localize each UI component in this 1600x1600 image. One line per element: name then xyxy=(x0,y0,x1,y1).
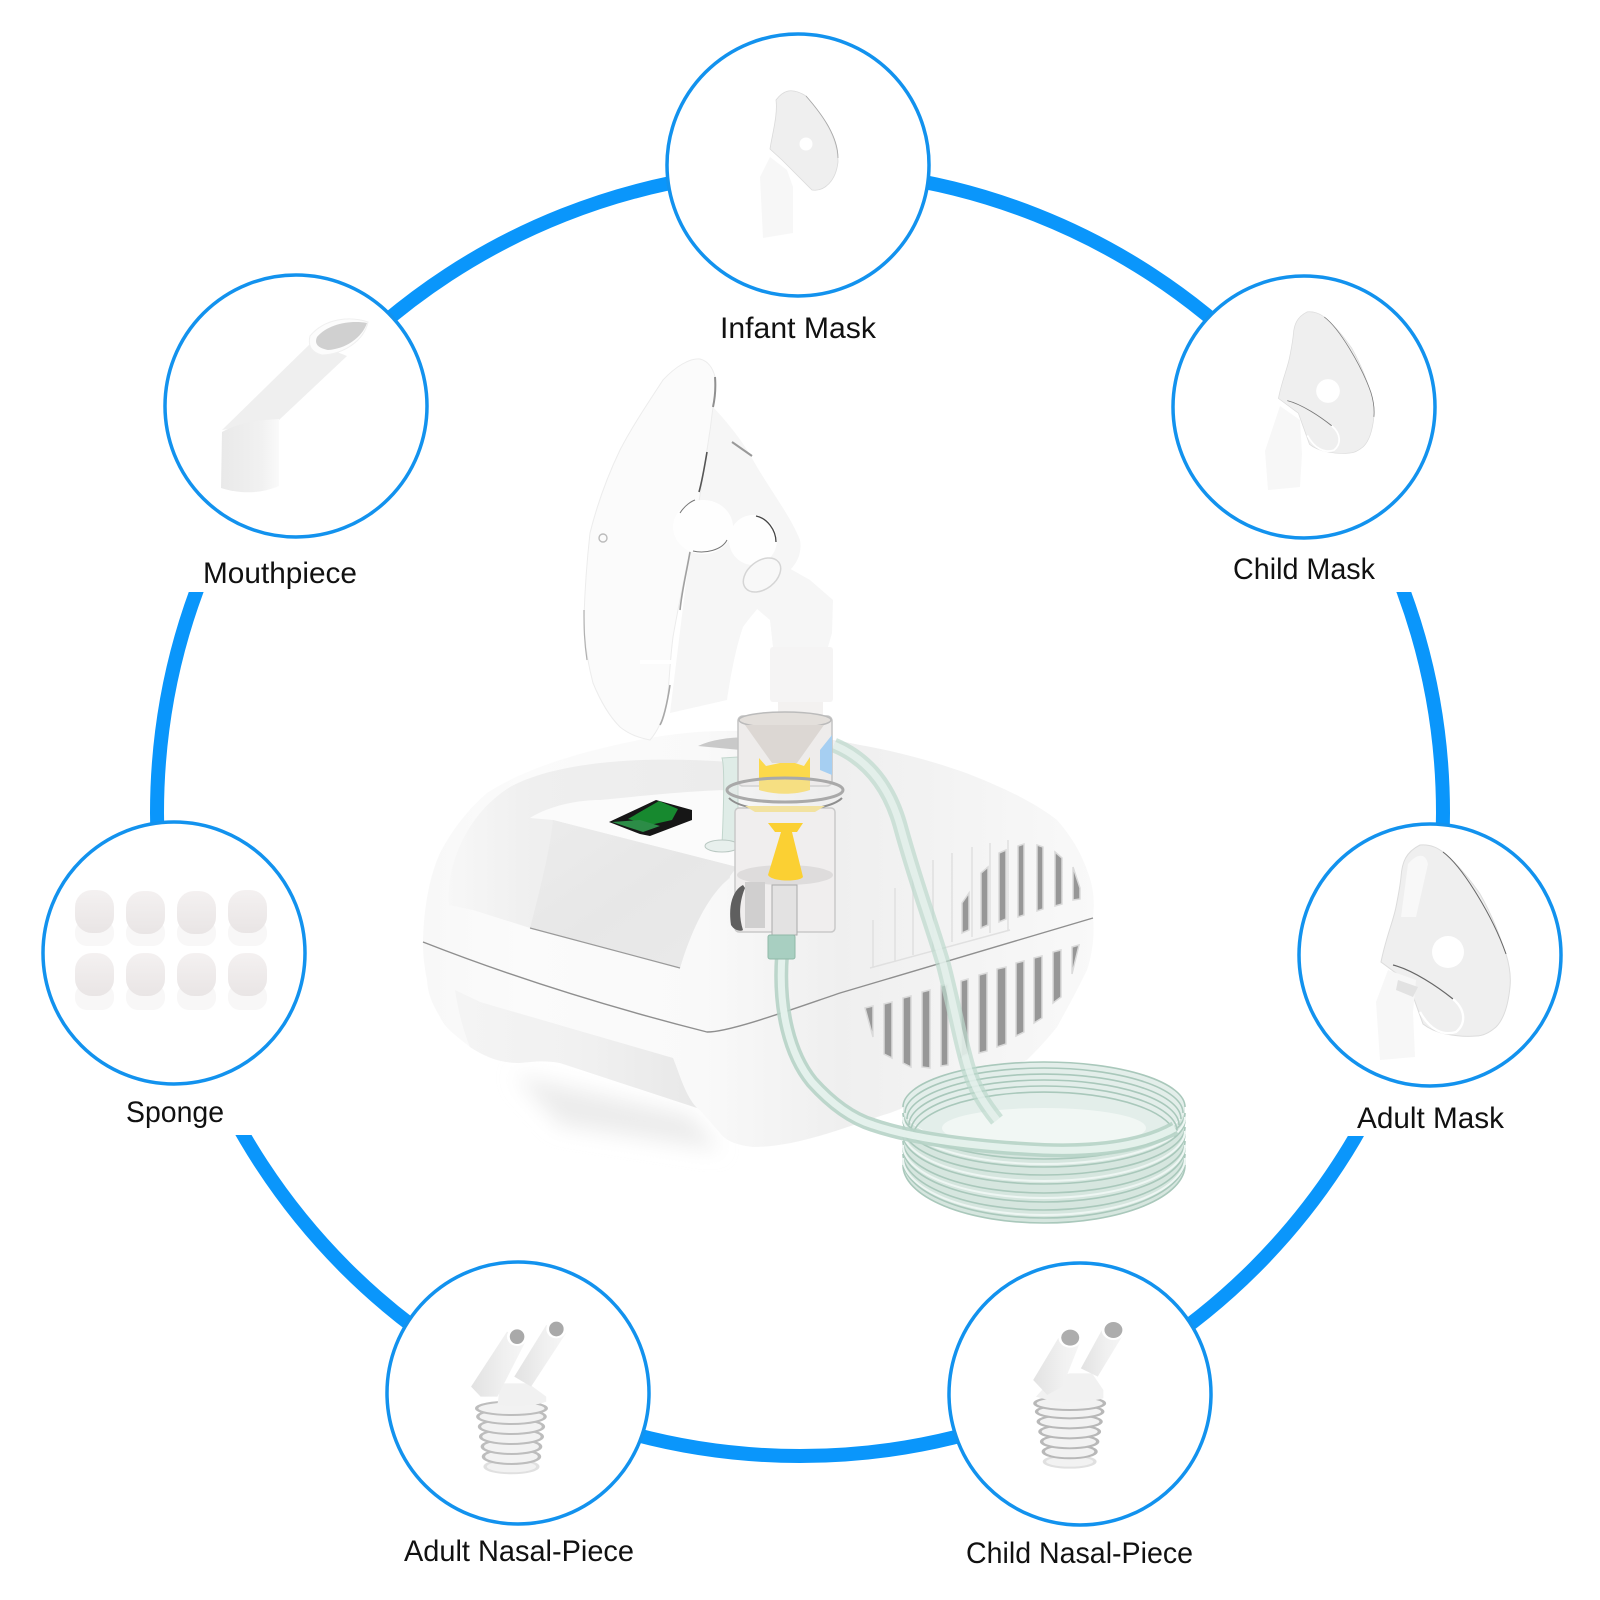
panel: child mask xyxy=(1173,276,1435,586)
label: sponge: Sponge xyxy=(126,1096,224,1129)
face mask xyxy=(584,359,801,740)
top label plates xyxy=(698,737,762,752)
inlet tubing xyxy=(781,955,1175,1150)
icon: mouthpiece xyxy=(221,319,368,492)
icon: adult mask xyxy=(1376,845,1510,1060)
air tubing to coil xyxy=(834,745,997,1120)
lower vent slats xyxy=(865,945,1079,1068)
label: adult nasal-piece: Adult Nasal-Piece xyxy=(404,1535,634,1568)
panel: infant mask xyxy=(667,34,929,345)
compressor body xyxy=(423,731,1094,1147)
label: adult mask: Adult Mask xyxy=(1357,1102,1505,1135)
label: child mask: Child Mask xyxy=(1233,553,1376,586)
platform top xyxy=(530,790,737,867)
recess front face xyxy=(530,820,737,968)
panel: mouthpiece xyxy=(165,275,427,590)
icon: child nasal-piece xyxy=(1033,1320,1125,1468)
panel: sponge xyxy=(43,822,305,1129)
upper vent slats xyxy=(962,844,1080,933)
elbow connector xyxy=(737,551,833,724)
product: nebulizer compressor xyxy=(423,359,1185,1223)
floor shadow xyxy=(515,1075,720,1150)
ring: blue connector circle xyxy=(157,170,1443,1456)
panel: adult nasal-piece xyxy=(387,1262,649,1568)
label: infant mask: Infant Mask xyxy=(720,312,877,345)
icon: adult nasal-piece xyxy=(471,1320,566,1473)
icon: eight sponge filters xyxy=(75,890,267,1010)
panel: adult mask xyxy=(1299,824,1561,1135)
panel: child nasal-piece xyxy=(949,1263,1211,1570)
ghost vent outlines xyxy=(870,840,1010,968)
handle lip line xyxy=(530,928,680,968)
icon: infant mask xyxy=(760,91,838,238)
body seam xyxy=(423,918,1093,1032)
icon: child mask xyxy=(1265,312,1374,490)
medicine cup xyxy=(705,712,843,959)
label: child nasal-piece: Child Nasal-Piece xyxy=(966,1537,1193,1570)
label: mouthpiece: Mouthpiece xyxy=(203,557,357,590)
power switch xyxy=(609,800,692,836)
tubing coil xyxy=(903,1062,1185,1223)
lower recess xyxy=(455,990,697,1108)
handle hollow xyxy=(449,760,730,968)
